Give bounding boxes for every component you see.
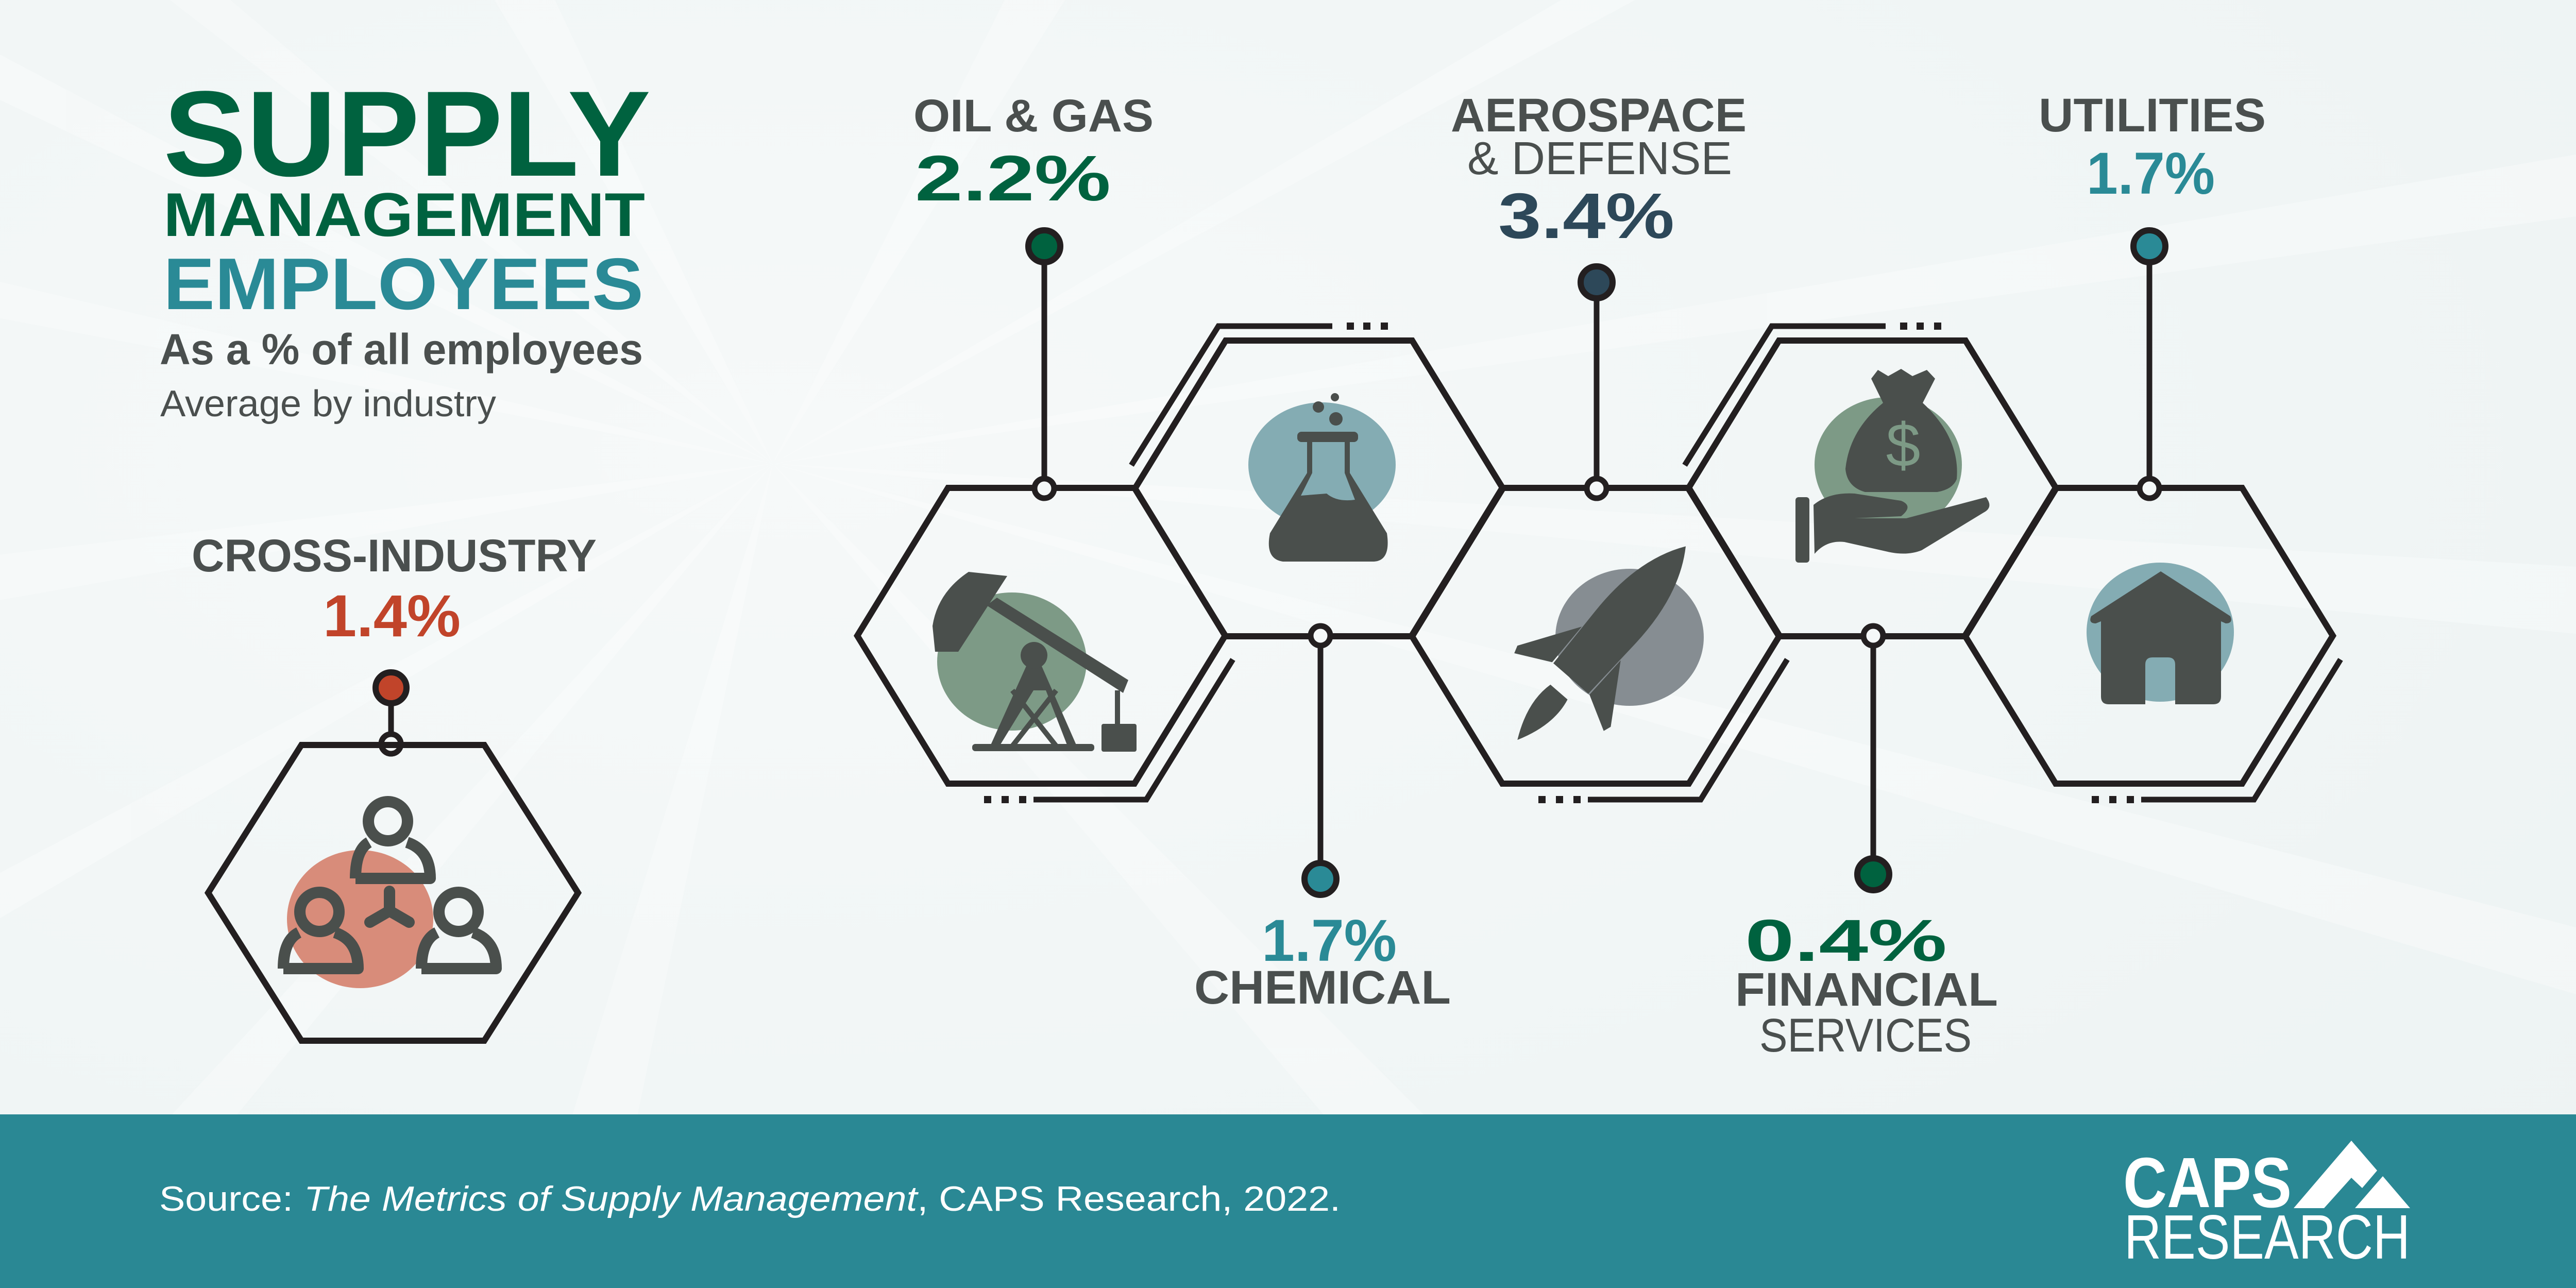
- subtitle: [160, 325, 643, 425]
- label: financial services: [1735, 908, 1998, 1062]
- hexagon: cross-industry: [208, 745, 578, 1041]
- label: aerospace & defense: [1451, 89, 1747, 252]
- label: financial services: 0.4%: [1745, 908, 1947, 974]
- label: cross-industry: CROSS-INDUSTRY: [192, 530, 597, 581]
- icon: money bag in hand: $: [1886, 411, 1920, 480]
- icon: money bag in hand: [1795, 369, 1989, 563]
- label: utilities: 1.7%: [2087, 141, 2215, 207]
- label: cross-industry: [192, 530, 597, 649]
- panel: oil & gas: [913, 90, 1154, 752]
- source text: Source: The Metrics of Supply Management , CAPS Research, 2022.: [159, 1179, 1341, 1218]
- icon: rocket: [1471, 506, 1733, 781]
- pin: cross-industry: [376, 672, 406, 754]
- pin: oil & gas: [1028, 230, 1060, 498]
- panel: aerospace & defense: [1451, 89, 1747, 781]
- panel: financial services: [1735, 369, 1998, 1062]
- label: chemical: [1194, 908, 1451, 1014]
- subtitle: As a % of all employees: [160, 325, 643, 374]
- logo: CAPS Research: CAPS: [2123, 1143, 2292, 1223]
- label: oil & gas: OIL & GAS: [913, 90, 1154, 141]
- label: oil & gas: 2.2%: [915, 143, 1111, 214]
- pin: financial: [1857, 626, 1889, 890]
- title: SUPPLY: [163, 66, 651, 202]
- label: utilities: [2039, 89, 2266, 207]
- icon: oil pump jack: [933, 572, 1137, 752]
- hexagon grid: [857, 341, 2333, 784]
- label: aerospace & defense: 3.4%: [1498, 180, 1674, 252]
- label: chemical: 1.7%: [1262, 908, 1397, 974]
- title: MANAGEMENT: [163, 180, 645, 249]
- label: aerospace & defense: & DEFENSE: [1467, 133, 1732, 184]
- label: oil & gas: [913, 90, 1154, 214]
- icon: people network: [283, 802, 496, 988]
- icon: flask: [1248, 393, 1396, 562]
- logo: CAPS Research: [2123, 1141, 2410, 1272]
- footer band: [0, 1114, 2576, 1288]
- pin: utilities: [2133, 230, 2165, 498]
- panel: chemical: [1194, 393, 1451, 1014]
- pin: aerospace: [1581, 266, 1613, 498]
- label: financial services: SERVICES: [1759, 1009, 1972, 1062]
- subtitle: Average by industry: [160, 383, 496, 425]
- title: [163, 66, 651, 325]
- panel: utilities: [2039, 89, 2266, 704]
- icon: house: [2087, 563, 2234, 704]
- label: aerospace & defense: AEROSPACE: [1451, 89, 1747, 142]
- logo: CAPS Research: RESEARCH: [2124, 1202, 2410, 1272]
- decorative offset lines: [1033, 326, 2341, 800]
- pin: chemical: [1304, 626, 1336, 895]
- label: chemical: CHEMICAL: [1194, 961, 1451, 1014]
- label: utilities: UTILITIES: [2039, 89, 2266, 142]
- label: financial services: FINANCIAL: [1735, 963, 1998, 1016]
- panel: cross-industry: [192, 530, 597, 1041]
- title: EMPLOYEES: [163, 243, 643, 325]
- label: cross-industry: 1.4%: [323, 583, 461, 649]
